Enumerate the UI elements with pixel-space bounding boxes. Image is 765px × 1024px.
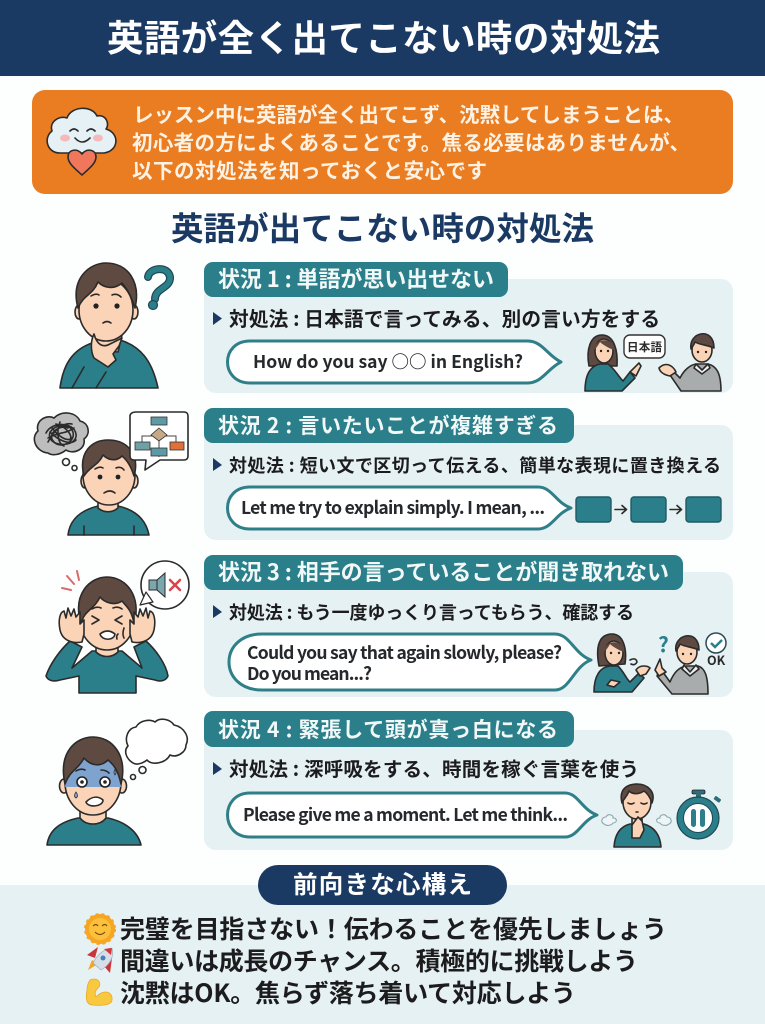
icon: confused person with tangled thoughts — [34, 412, 188, 535]
speech bubble 2: Let me try to explain simply. I mean, ... — [241, 495, 545, 520]
icon: woman and man talking about Japanese — [585, 334, 721, 391]
header band — [0, 0, 765, 76]
speech bubble 1 — [228, 341, 561, 383]
icon: sun — [85, 914, 115, 944]
icon: smiling cloud with heart — [47, 108, 116, 175]
tab: situation 1: 状況 1 : 単語が思い出せない — [218, 262, 494, 294]
icon: flexed arm — [86, 979, 112, 1005]
icon: woman and man confirming — [594, 629, 726, 694]
speech bubble: muted speaker — [140, 561, 189, 609]
tab: situation 4: 状況 4 : 緊張して頭が真っ白になる — [218, 714, 558, 744]
speech bubble 4 — [228, 793, 597, 837]
tab: situation 2: 状況 2 : 言いたいことが複雑すぎる — [218, 410, 558, 440]
icon: person covering ears — [46, 561, 189, 693]
icon: woman and man confirming: OK — [707, 650, 726, 669]
icon: question mark — [148, 269, 170, 310]
tip 2: 間違いは成長のチャンス。積極的に挑戦しよう — [120, 942, 638, 978]
speech bubble 1: How do you say ○○ in English? — [253, 349, 523, 374]
speech bubble 4: Please give me a moment. Let me think... — [243, 802, 568, 827]
panel: positive mindset — [0, 865, 765, 1024]
coping method 1: 対処法 : 日本語で言ってみる、別の言い方をする — [229, 303, 660, 332]
icon: stopwatch — [677, 790, 721, 839]
intro text: 初心者の方によくあることです。焦る必要はありませんが、 — [132, 126, 690, 156]
icon: rocket — [87, 947, 113, 973]
speech box: flowchart — [130, 412, 188, 470]
panel: situation 1 — [204, 262, 733, 393]
coping method 4: 対処法 : 深呼吸をする、時間を稼ぐ言葉を使う — [229, 753, 639, 782]
panel: situation 2 — [204, 408, 733, 540]
intro text: レッスン中に英語が全く出てこず、沈黙してしまうことは、 — [133, 98, 684, 128]
panel: intro banner — [32, 90, 733, 194]
section heading: 英語が出てこない時の対処法 — [171, 203, 594, 250]
thought cloud: empty — [126, 719, 187, 780]
panel: situation 4 — [204, 711, 733, 850]
intro text: 以下の対処法を知っておくと安心です — [132, 154, 487, 184]
panel: situation 3 — [204, 555, 733, 697]
icon: stress lines — [62, 571, 79, 590]
thought cloud: tangled — [34, 413, 88, 470]
speech bubble 3 — [229, 634, 591, 690]
title: 英語が全く出てこない時の対処法 — [107, 9, 660, 62]
speech bubble 3: Do you mean...? — [247, 661, 372, 686]
pill heading: 前向きな心構え — [293, 866, 472, 901]
tip 1: 完璧を目指さない！伝わることを優先しましょう — [120, 910, 667, 946]
coping method 3: 対処法 : もう一度ゆっくり言ってもらう、確認する — [229, 599, 634, 625]
speech bubble 2 — [228, 487, 571, 529]
icon: three step flow — [576, 497, 721, 522]
coping method 2: 対処法 : 短い文で区切って伝える、簡単な表現に置き換える — [229, 452, 721, 478]
icon: woman and man talking about Japanese: 日本語 — [627, 339, 662, 355]
icon: person breathing — [602, 784, 671, 847]
icon: panicked person with blank mind — [47, 719, 187, 845]
intro text — [132, 98, 690, 184]
pill heading — [258, 865, 507, 905]
tab: situation 3: 状況 3 : 相手の言っていることが聞き取れない — [218, 555, 669, 587]
icon: woman and man confirming: ? — [658, 629, 669, 659]
speech bubble 3: Could you say that again slowly, please? — [247, 640, 562, 665]
tip 3: 沈黙はOK。焦らず落ち着いて対応しよう — [120, 974, 576, 1010]
icon: thinking person with question mark — [60, 263, 170, 388]
